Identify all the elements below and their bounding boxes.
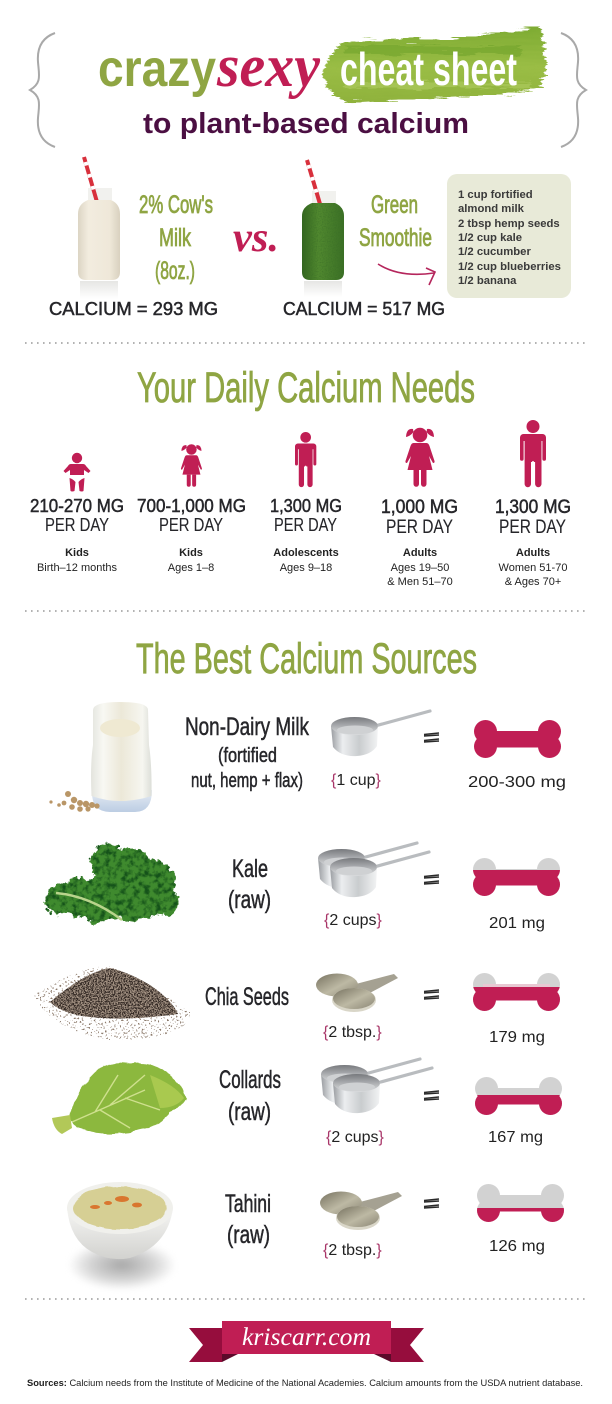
column: adults 19 to 50: Adults	[403, 547, 437, 559]
icon: 2 measuring cups	[318, 843, 429, 897]
column: kids birth to 12 months: PER DAY	[45, 515, 109, 535]
footer ribbon: kriscarr.com: kriscarr.com	[242, 1324, 371, 1351]
text: 201 mg: 201 mg	[489, 915, 545, 932]
icon: equals sign	[424, 1199, 439, 1208]
icon: calcium bone 179	[473, 973, 560, 1011]
text: tahini	[225, 1190, 271, 1249]
text: non-dairy milk: (fortified	[218, 745, 277, 767]
panel: daily calcium needs	[30, 364, 571, 588]
image: kale	[45, 844, 179, 923]
column: adolescents: Adolescents	[273, 547, 339, 559]
text: tahini: (raw)	[227, 1221, 270, 1249]
image: collard leaf	[52, 1063, 186, 1134]
icon: calcium bone 201	[473, 858, 560, 896]
icon: 1 measuring cup	[331, 711, 430, 756]
text: non-dairy milk: Non-Dairy Milk	[185, 713, 309, 741]
icon: woman	[405, 428, 435, 487]
title word: crazy: crazy	[98, 40, 216, 98]
text: 200-300 mg: 200-300 mg	[468, 774, 566, 791]
icon: 2 measuring spoons	[316, 974, 398, 1012]
text: green smoothie: Green	[371, 191, 418, 219]
icon: equals sign	[424, 990, 439, 999]
text: 1 cup: {1 cup}	[331, 772, 381, 789]
column: adults 19 to 50: & Men 51–70	[387, 576, 453, 588]
text: non-dairy milk	[185, 713, 309, 792]
row: kale	[45, 843, 560, 932]
text: kale	[228, 855, 271, 914]
text: 2 tbsp: {2 tbsp.}	[323, 1242, 382, 1259]
text: collards: (raw)	[228, 1098, 271, 1126]
image: milk bottle with straw	[78, 157, 120, 299]
panel: smoothie recipe: 2 tbsp hemp seeds	[458, 218, 560, 230]
row: tahini	[67, 1182, 564, 1290]
column: kids ages 1 to 8: Kids	[179, 547, 203, 559]
text: 2 tbsp: {2 tbsp.}	[323, 1024, 382, 1041]
column: kids ages 1 to 8: 700-1,000 MG	[137, 496, 246, 516]
text: collards	[219, 1066, 281, 1126]
text: non-dairy milk: nut, hemp + flax)	[191, 770, 303, 792]
column: adults 51 and up	[495, 420, 571, 588]
text: 2% cow's milk	[139, 191, 213, 285]
column: kids birth to 12 months: Kids	[65, 547, 89, 559]
column: kids ages 1 to 8	[137, 444, 246, 574]
column: kids birth to 12 months	[30, 453, 124, 574]
panel: smoothie recipe: 1/2 cup blueberries	[458, 261, 561, 273]
title word: sexy: sexy	[216, 33, 320, 99]
text: 179 mg: 179 mg	[489, 1029, 545, 1046]
text: 167 mg: 167 mg	[488, 1129, 543, 1146]
text: 2 cups: {2 cups}	[324, 912, 382, 929]
image: kale stem	[56, 893, 122, 920]
icon: left curly brace	[30, 33, 55, 147]
column: adults 19 to 50: Ages 19–50	[391, 562, 449, 574]
column: adults 51 and up: 1,300 MG	[495, 497, 571, 518]
icon: equals sign	[424, 875, 439, 884]
image: glass of milk and nuts	[49, 702, 152, 812]
icon: man	[520, 420, 546, 487]
panel: smoothie recipe: 1/2 cup kale	[458, 232, 522, 244]
text: milk calcium amount: CALCIUM = 293 MG	[49, 299, 218, 319]
subtitle: to plant-based calcium	[143, 108, 469, 140]
column: adults 51 and up: PER DAY	[499, 517, 566, 538]
header: title block	[30, 26, 586, 147]
text: 2% cow's milk: (8oz.)	[155, 257, 195, 285]
text: green smoothie	[359, 191, 432, 252]
icon: full calcium bone	[474, 720, 561, 758]
text: chia seeds: Chia Seeds	[205, 983, 289, 1011]
text: 2% cow's milk: 2% Cow's	[139, 191, 213, 219]
text: kale: Kale	[232, 855, 268, 883]
panel: smoothie recipe	[447, 174, 571, 298]
image: bowl of tahini	[67, 1182, 176, 1290]
panel: smoothie recipe: 1/2 cucumber	[458, 246, 531, 258]
image: chia seeds	[34, 967, 190, 1040]
column: adults 19 to 50: PER DAY	[386, 517, 453, 538]
text: tahini: Tahini	[225, 1190, 271, 1218]
row: collards	[52, 1059, 562, 1146]
panel: smoothie recipe: 1 cup fortified	[458, 189, 533, 201]
column: kids ages 1 to 8: PER DAY	[159, 515, 223, 535]
text: green smoothie: Smoothie	[359, 224, 432, 252]
column: adults 51 and up: Women 51-70	[499, 562, 567, 574]
icon: boy	[295, 432, 316, 487]
text: 2 cups: {2 cups}	[326, 1129, 384, 1146]
text: smoothie calcium amount: CALCIUM = 517 MG	[283, 299, 445, 319]
icon: calcium bone 126	[477, 1184, 564, 1222]
column: adolescents	[270, 432, 342, 574]
sources note: Sources: Calcium needs from the Institute of Medicine of the National Academies. Calcium amounts from the USDA nutrient database.	[27, 1378, 583, 1388]
arrow to recipe	[378, 264, 435, 285]
column: adolescents: 1,300 MG	[270, 496, 342, 516]
panel: milk vs smoothie	[49, 157, 571, 319]
footer ribbon: kriscarr.com	[189, 1321, 424, 1362]
column: kids birth to 12 months: 210-270 MG	[30, 496, 124, 516]
icon: equals sign	[424, 733, 439, 742]
row: chia seeds	[34, 967, 560, 1046]
column: kids birth to 12 months: Birth–12 months	[37, 562, 118, 574]
column: adults 19 to 50: 1,000 MG	[381, 497, 458, 518]
row: non-dairy milk	[49, 702, 566, 812]
green paint brush stroke	[322, 26, 546, 102]
column: kids ages 1 to 8: Ages 1–8	[168, 562, 214, 574]
panel: smoothie recipe: almond milk	[458, 203, 525, 215]
panel: best calcium sources	[34, 635, 566, 1290]
icon: baby	[64, 453, 90, 492]
icon: 2 measuring spoons	[320, 1192, 402, 1230]
column: adults 51 and up: & Ages 70+	[505, 576, 561, 588]
text: collards: Collards	[219, 1066, 281, 1094]
column: adults 51 and up: Adults	[516, 547, 550, 559]
column: adults 19 to 50	[381, 428, 458, 588]
icon: small girl	[181, 444, 202, 487]
icon: 2 measuring cups	[321, 1059, 432, 1113]
column: adolescents: Ages 9–18	[280, 562, 332, 574]
text: 126 mg: 126 mg	[489, 1238, 545, 1255]
icon: right curly brace	[561, 33, 586, 147]
panel: smoothie recipe: 1/2 banana	[458, 275, 517, 287]
icon: equals sign	[424, 1091, 439, 1100]
column: adolescents: PER DAY	[274, 515, 337, 535]
text: kale: (raw)	[228, 886, 271, 914]
icon: calcium bone 167	[475, 1077, 562, 1115]
text: 2% cow's milk: Milk	[159, 224, 191, 252]
image: green smoothie bottle with straw	[302, 160, 344, 297]
title words: cheat sheet: cheat sheet	[340, 43, 517, 95]
text: vs.: vs.	[233, 215, 279, 261]
